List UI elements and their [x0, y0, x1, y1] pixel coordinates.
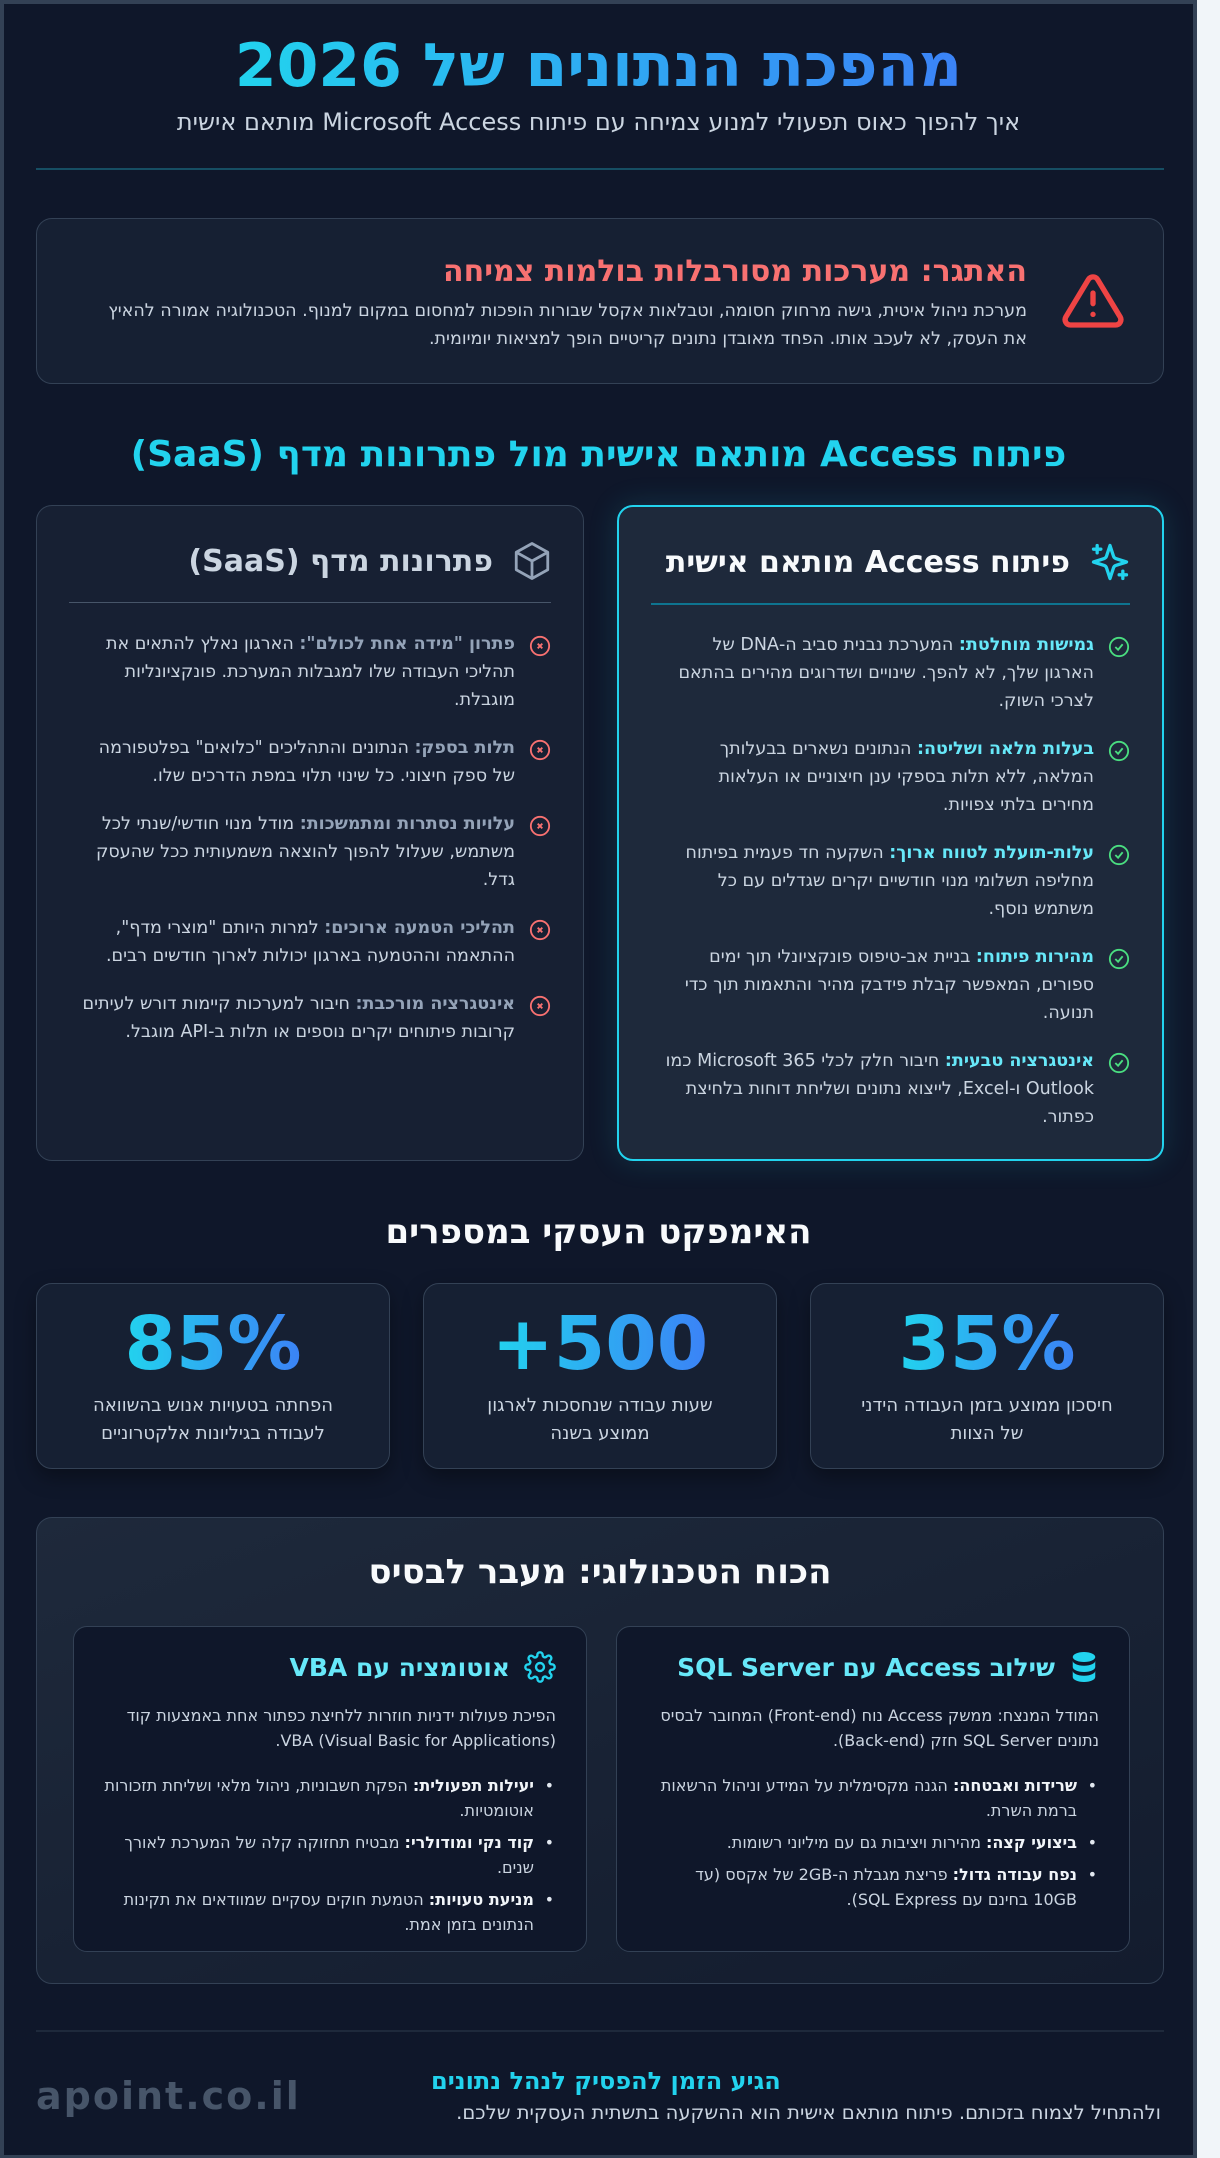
card heading: פתרונות מדף (SaaS)	[188, 544, 493, 578]
subtitle: איך להפוך כאוס תפעולי למנוע צמיחה עם פיתוח Microsoft Access מותאם אישית	[177, 108, 1020, 136]
stat: 85%: הפחתה בטעויות אנוש בהשוואה	[93, 1395, 333, 1416]
card: SQL Server	[616, 1626, 1130, 1952]
panel: SaaS	[36, 505, 584, 1161]
section heading: impact: האימפקט העסקי במספרים	[385, 1212, 812, 1252]
stat: +500: שעות עבודה שנחסכות לארגון	[487, 1395, 713, 1416]
list: disadvantages: תהליכי הטמעה ארוכים: למרות היותם "מוצרי מדף", ההתאמה וההטמעה בארגון יכולות לארוך חודשים רבים.	[106, 918, 515, 966]
panel: custom access	[617, 505, 1164, 1161]
list: disadvantages: עלויות נסתרות ומתמשכות: מודל מנוי חודשי/שנתי לכל משתמש, שעלול להפוך להוצאה משמעותית ככל שהעסק גדל.	[96, 814, 515, 890]
list: advantages: אינטגרציה טבעית: חיבור חלק לכלי Microsoft 365 כמו Outlook ו-Excel, לייצוא נתונים ושליחת דוחות בלחיצת כפתור.	[666, 1051, 1094, 1127]
card: VBA: אוטומציה עם VBA	[289, 1652, 510, 1682]
stat: 35%: חיסכון ממוצע בזמן העבודה הידני	[861, 1395, 1113, 1416]
footer logo: apoint.co.il	[36, 2074, 301, 2118]
footer CTA	[431, 2067, 1161, 2124]
list: advantages: גמישות מוחלטת: המערכת נבנית סביב ה-DNA של הארגון שלך, לא להפך. שינויים ושדרוגים מהירים בהתאם לצרכי השוק.	[678, 635, 1094, 711]
card: SQL Server: שרידות ואבטחה: הגנה מקסימלית על המידע וניהול הרשאות ברמת השרת.	[661, 1776, 1077, 1820]
list: disadvantages: תלות בספק: הנתונים והתהליכים "כלואים" בפלטפורמה של ספק חיצוני. כל שינוי תלוי במפת הדרכים שלו.	[99, 738, 515, 786]
card: SQL Server: שילוב Access עם SQL Server	[677, 1652, 1055, 1682]
footer CTA: ולהתחיל לצמוח בזכותם. פיתוח מותאם אישית הוא ההשקעה בתשתית העסקית שלכם.	[456, 2101, 1161, 2124]
title: מהפכת הנתונים של 2026	[235, 31, 962, 101]
stat: 35%: 35%	[898, 1301, 1076, 1387]
footer CTA: הגיע הזמן להפסיק לנהל נתונים	[431, 2067, 781, 2095]
card: SQL Server: המודל המנצח: ממשק Access נוח (Front-end) המחובר לבסיס נתונים SQL Server חזק (Back-end).	[660, 1706, 1099, 1750]
stat: +500: +500	[492, 1301, 708, 1387]
stat: 35%	[810, 1283, 1164, 1469]
stat: +500	[423, 1283, 777, 1469]
list: advantages: בעלות מלאה ושליטה: הנתונים נשארים בבעלותך המלאה, ללא תלות בספקי ענן חיצוניים או העלאות מחירים בלתי צפויות.	[719, 739, 1094, 815]
panel: challenge	[36, 218, 1164, 384]
card: VBA: הפיכת פעולות ידניות חוזרות ללחיצת כפתור אחת באמצעות קוד VBA (Visual Basic for Applications).	[127, 1706, 556, 1750]
challenge heading: האתגר: מערכות מסורבלות בולמות צמיחה	[443, 254, 1027, 289]
stat: 35%: של הצוות	[951, 1423, 1023, 1444]
card: SQL Server: ביצועי קצה: מהירות ויציבות גם עם מיליוני רשומות.	[727, 1833, 1077, 1852]
icon: warning	[1062, 274, 1124, 328]
card: VBA	[73, 1626, 587, 1952]
stat: 85%	[36, 1283, 390, 1469]
card: SQL Server: נפח עבודה גדול: פריצת מגבלת ה-2GB של אקסס (עד 10GB בחינם עם SQL Express).	[695, 1865, 1077, 1909]
list: advantages: מהירות פיתוח: בניית אב-טיפוס פונקציונלי תוך ימים ספורים, המאפשר קבלת פידבק מהיר והתאמות תוך כדי תנועה.	[685, 947, 1094, 1023]
challenge text: מערכת ניהול איטית, גישה מרחוק חסומה, וטבלאות אקסל שבורות הופכות למחסום במקום למנוף. הטכנולוגיה אמורה להאיץ את העסק, לא לעכב אותו. הפחד מאובדן נתונים קריטיים הופך למציאות יומיומית.	[108, 301, 1027, 349]
stat: 85%: לעבודה בגיליונות אלקטרוניים	[101, 1423, 325, 1444]
list: disadvantages	[83, 634, 550, 1042]
card heading: פיתוח Access מותאם אישית	[666, 544, 1070, 580]
card: VBA: מניעת טעויות: הטמעת חוקים עסקיים שמוודאים את תקינות הנתונים בזמן אמת.	[124, 1890, 534, 1934]
stat: 85%: 85%	[124, 1301, 302, 1387]
list: advantages	[666, 635, 1130, 1127]
card: VBA: יעילות תפעולית: הפקת חשבוניות, ניהול מלאי ושליחת תזכורות אוטומטיות.	[104, 1776, 534, 1820]
list: advantages: עלות-תועלת לטווח ארוך: השקעה חד פעמית בפיתוח מחליפה תשלומי מנוי חודשיים יקרים שגדלים עם כל משתמש נוסף.	[686, 843, 1094, 919]
list: disadvantages: פתרון "מידה אחת לכולם": הארגון נאלץ להתאים את תהליכי העבודה שלו למגבלות המערכת. פונקציונליות מוגבלת.	[106, 634, 515, 710]
card: VBA: קוד נקי ומודולרי: מבטיח תחזוקה קלה של המערכת לאורך שנים.	[124, 1833, 534, 1877]
section heading: comparison: פיתוח Access מותאם אישית מול פתרונות מדף (SaaS)	[131, 434, 1066, 475]
stat: +500: ממוצע בשנה	[550, 1423, 650, 1444]
panel: technology	[36, 1517, 1164, 1984]
list: disadvantages: אינטגרציה מורכבת: חיבור למערכות קיימות דורש לעיתים קרובות פיתוחים יקרים נוספים או תלות ב-API מוגבל.	[83, 994, 515, 1042]
tech heading: הכוח הטכנולוגי: מעבר לבסיס	[369, 1552, 831, 1592]
